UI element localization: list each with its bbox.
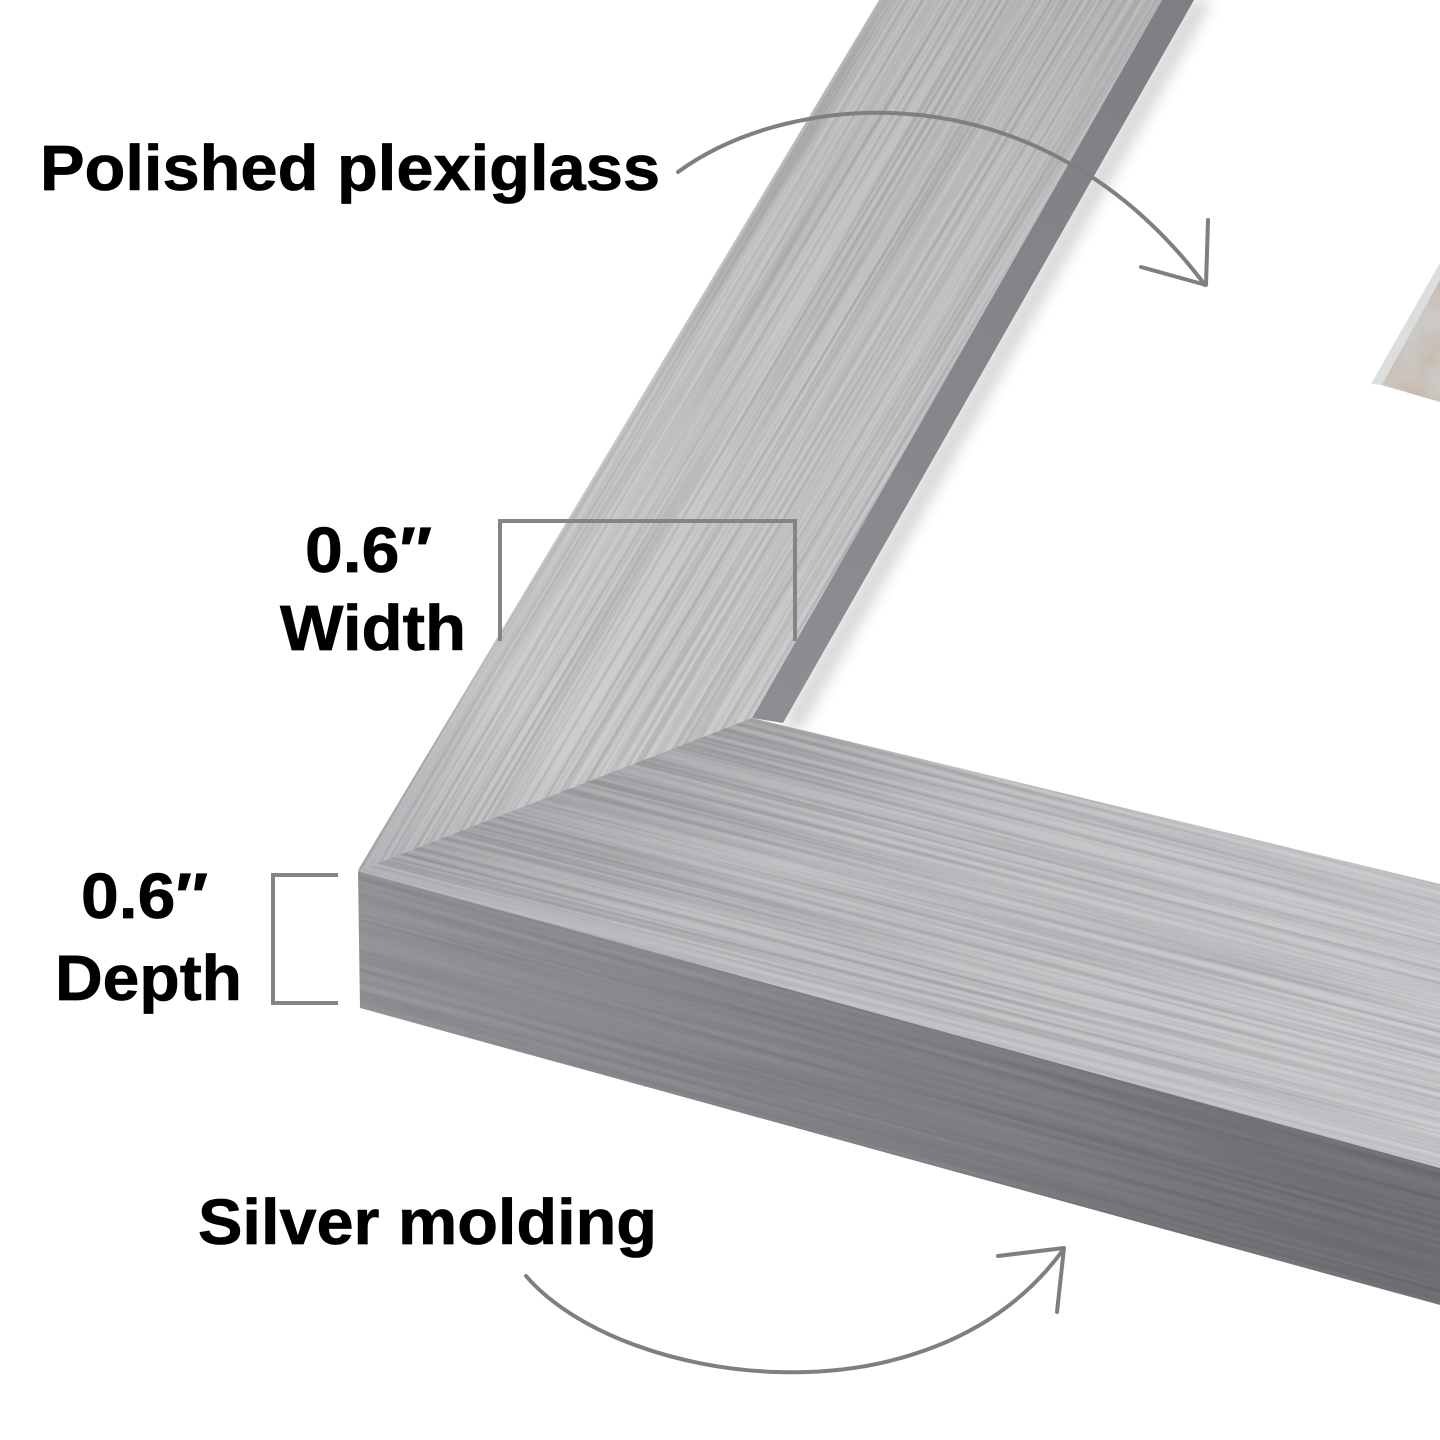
label: 0.6 width (280, 514, 466, 664)
vertical arm top face (358, 0, 1162, 870)
label: polished plexiglass: Polished plexiglass (40, 132, 660, 204)
bracket: width (500, 521, 795, 641)
label: silver molding: Silver molding (198, 1186, 657, 1258)
horizontal arm top face (358, 718, 1440, 1168)
artwork corner (1371, 263, 1440, 405)
label: 0.6 width: Width (280, 592, 466, 664)
arrow: polished plexiglass (678, 113, 1208, 285)
front side face (358, 871, 1440, 1305)
vertical arm inner side (752, 0, 1194, 723)
label: 0.6 depth: Depth (55, 942, 242, 1014)
label: 0.6 depth (55, 860, 242, 1014)
label: 0.6 depth: 0.6″ (81, 860, 208, 932)
frame corner: silver molding (358, 0, 1440, 1305)
bracket: depth (273, 875, 338, 1003)
label: 0.6 width: 0.6″ (305, 514, 432, 586)
inner shadow of frame (783, 0, 1212, 732)
arrow: silver molding (526, 1248, 1064, 1372)
